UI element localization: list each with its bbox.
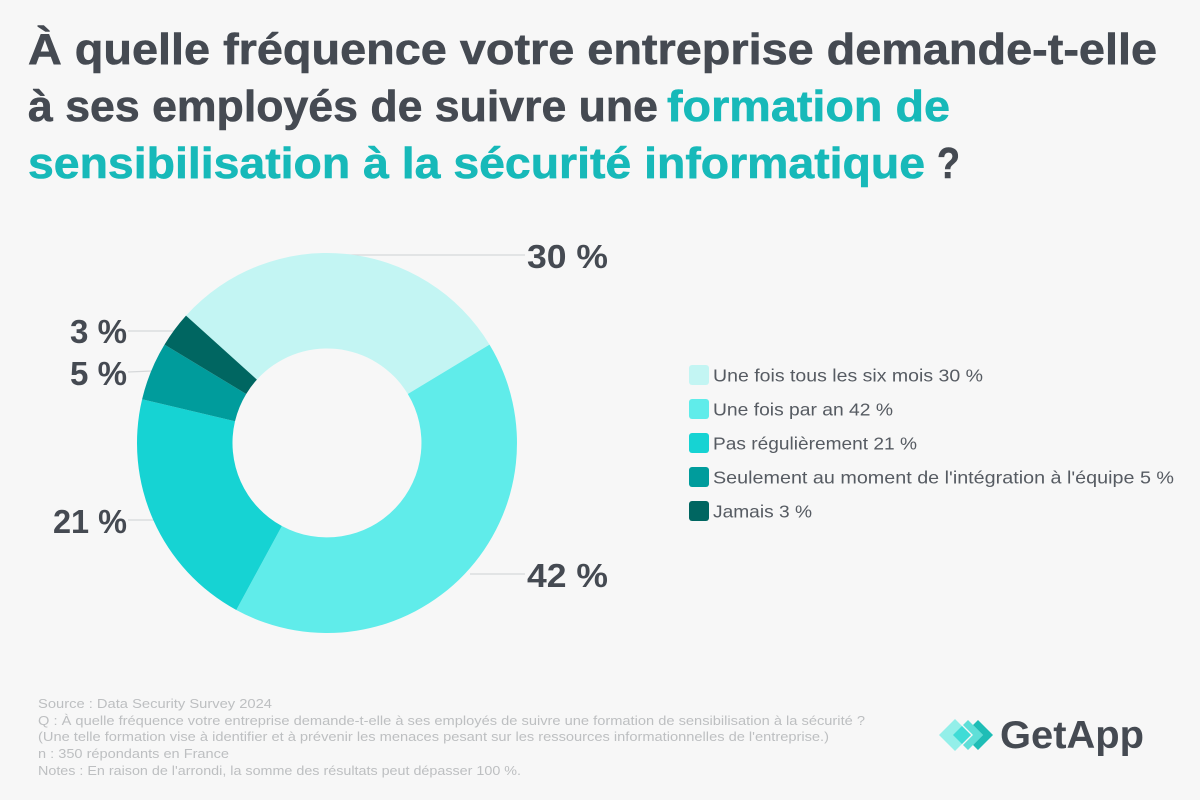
title: sensibilisation à la sécurité informatique (28, 139, 925, 188)
legend (689, 365, 1174, 522)
title (28, 24, 1157, 188)
legend item: 21 %: Pas régulièrement 21 % (713, 434, 917, 454)
data labels (53, 238, 608, 594)
source notes: Q : À quelle fréquence votre entreprise demande-t-elle à ses employés de suivre une formation de sensibilisation à la sécurité ? (38, 713, 865, 728)
legend item: 5 %: Seulement au moment de l'intégration à l'équipe 5 % (713, 468, 1174, 488)
slice: seulement à l'intégration 5 % (142, 345, 246, 421)
source notes: Source : Data Security Survey 2024 (38, 696, 272, 711)
leader lines (128, 255, 525, 574)
slice: une fois par an 42 % (236, 345, 517, 633)
legend item: 3 %: Jamais 3 % (713, 502, 812, 522)
legend item: 30 %: Une fois tous les six mois 30 % (713, 366, 983, 386)
data labels: 30 % (527, 238, 608, 275)
logo icon: diamond and chevrons (939, 719, 993, 751)
slice: jamais 3 % (164, 316, 257, 394)
source notes: n : 350 répondants en France (38, 746, 229, 761)
source notes (38, 696, 865, 778)
slice: pas régulièrement 21 % (137, 399, 282, 610)
title: à ses employés de suivre une (28, 82, 658, 131)
title: À quelle fréquence votre entreprise demande-t-elle (28, 24, 1157, 74)
title: ? (937, 139, 960, 188)
source notes: Notes : En raison de l'arrondi, la somme des résultats peut dépasser 100 %. (38, 763, 521, 778)
GetApp logo (939, 714, 1144, 757)
data labels: 3 % (70, 313, 127, 350)
source notes: (Une telle formation vise à identifier et à prévenir les menaces pesant sur les ressources informationnelles de l'entreprise.) (38, 729, 829, 744)
donut chart (128, 253, 525, 633)
slice: une fois tous les six mois 30 % (186, 253, 490, 394)
data labels: 42 % (527, 557, 608, 594)
title: formation de (667, 82, 950, 131)
legend item: 42 %: Une fois par an 42 % (713, 400, 893, 420)
data labels: 5 % (70, 355, 127, 392)
data labels: 21 % (53, 503, 127, 540)
logo wordmark: GetApp (1000, 714, 1144, 757)
